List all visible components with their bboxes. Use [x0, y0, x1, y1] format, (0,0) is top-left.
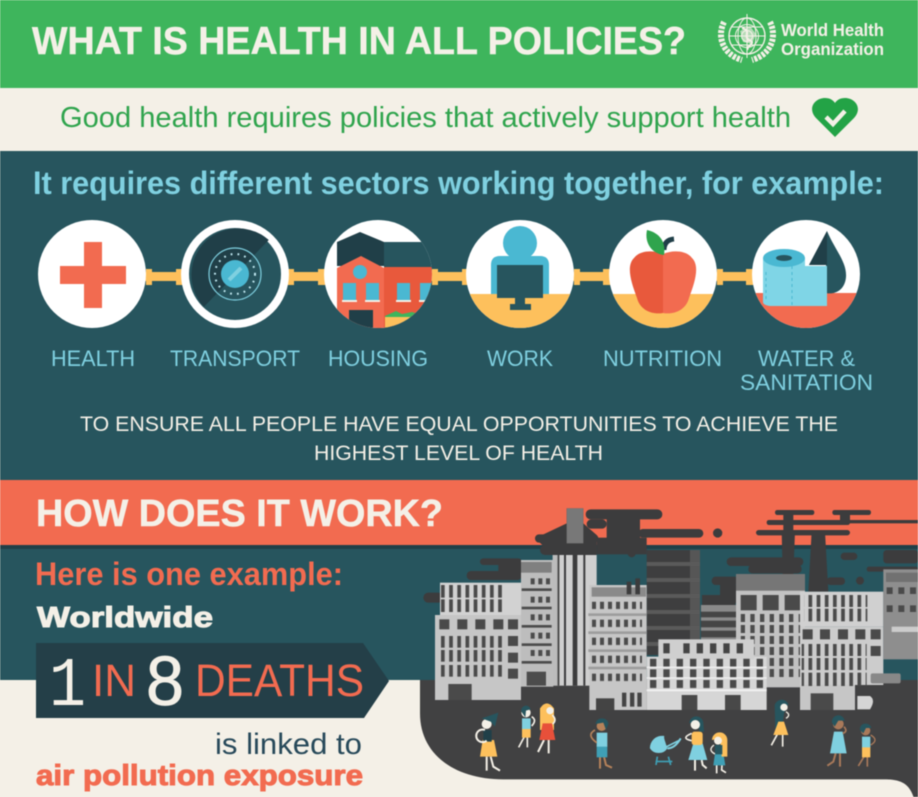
subtitle band: [0, 88, 918, 151]
word in: IN: [92, 655, 136, 706]
WHO wordmark: Organization: [781, 39, 884, 59]
sector labels: TRANSPORT: [170, 346, 300, 371]
person 1: [476, 713, 500, 771]
building 2: [521, 560, 553, 687]
ground: [420, 680, 918, 797]
statistic banner: [36, 642, 389, 727]
icon: nutrition apple: [609, 220, 717, 334]
statement text: TO ENSURE ALL PEOPLE HAVE EQUAL OPPORTUNITIES TO ACHIEVE THE: [80, 412, 838, 436]
example text: worldwide: Worldwide: [37, 602, 213, 634]
icon: housing: [324, 220, 434, 333]
statement text: HIGHEST LEVEL OF HEALTH: [314, 441, 603, 465]
person 7: [771, 700, 789, 747]
person 9: [858, 724, 875, 767]
sector labels: [51, 346, 873, 395]
person 6: [711, 732, 727, 773]
person 2: [519, 706, 534, 747]
example text: here is one example: Here is one example:: [35, 556, 343, 592]
person 8: [827, 715, 847, 767]
word deaths: DEATHS: [195, 655, 364, 706]
person 4: [591, 718, 612, 769]
building 7: [883, 569, 918, 659]
WHO wordmark: [781, 20, 884, 59]
small rear building: [701, 605, 736, 640]
building 3: [588, 578, 647, 710]
number one: 1: [49, 648, 86, 727]
sector labels: HOUSING: [328, 346, 428, 371]
building 5: [736, 574, 805, 687]
header band: [0, 0, 918, 88]
person 5: [686, 716, 707, 771]
text: air pollution exposure: air pollution exposure: [36, 760, 363, 792]
icon: transport wheel: [181, 220, 289, 328]
how does it work banner: [0, 480, 918, 549]
sector labels: SANITATION: [740, 370, 873, 395]
subtitle text: Good health requires policies that actively support health: [60, 102, 791, 134]
title: WHAT IS HEALTH IN ALL POLICIES?: [32, 20, 686, 63]
WHO logo: [721, 14, 884, 60]
low front building: [647, 639, 767, 710]
sector labels: WORK: [487, 346, 553, 371]
example panel background: [0, 549, 918, 680]
sector labels: WATER &: [758, 346, 855, 371]
statement text: [80, 412, 838, 465]
banner heading: HOW DOES IT WORK?: [36, 493, 443, 535]
icon: health cross: [38, 220, 146, 328]
building 6: [800, 592, 901, 710]
WHO wordmark: World Health: [781, 20, 884, 40]
sectors panel: [0, 151, 918, 480]
sectors heading: It requires different sectors working together, for example:: [33, 165, 884, 201]
person 3: [538, 703, 555, 753]
smoke clouds: [423, 509, 918, 605]
city illustration: [420, 508, 918, 797]
icon: work: [466, 220, 574, 334]
icon: water and sanitation: [752, 220, 860, 335]
sector labels: NUTRITION: [603, 346, 722, 371]
spire tower: [535, 508, 597, 686]
people: [476, 700, 875, 773]
connectors: [140, 269, 762, 285]
sector labels: HEALTH: [51, 346, 135, 371]
dark tower: [647, 550, 700, 655]
icon: heart with check: [812, 98, 858, 137]
pram: [650, 736, 681, 765]
building 1: [435, 583, 521, 700]
text: is linked to: is linked to: [215, 728, 362, 761]
number eight: 8: [146, 642, 184, 720]
